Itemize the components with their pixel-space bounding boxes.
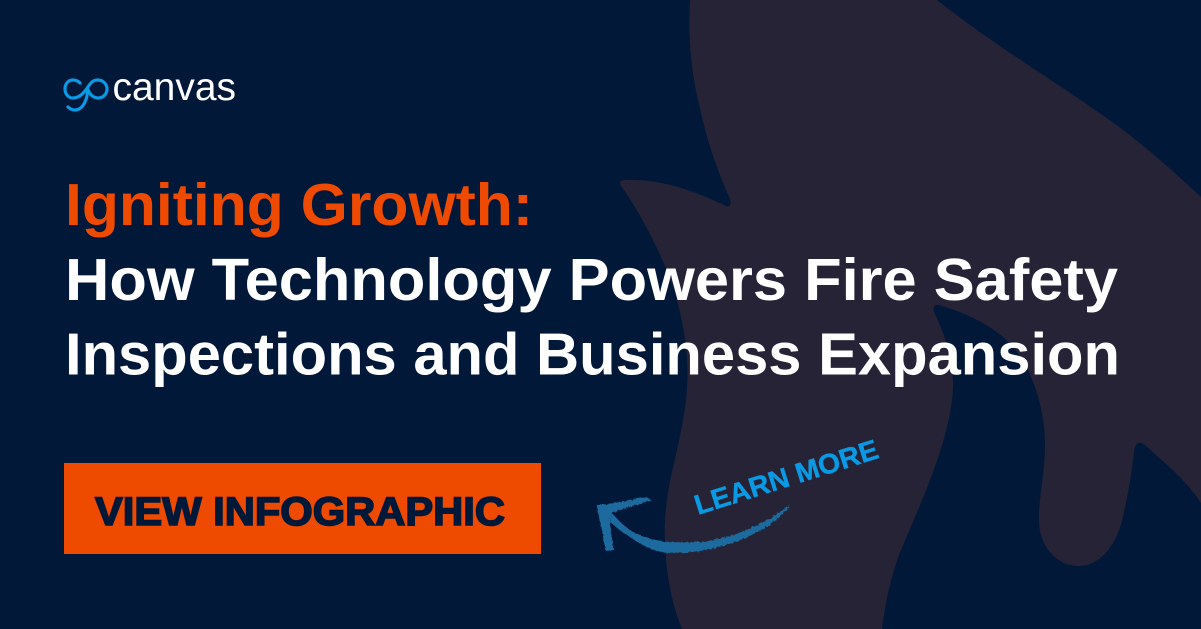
hand-drawn arrow (597, 497, 790, 553)
button background (64, 463, 541, 554)
arrow head (597, 497, 652, 551)
arrow shaft (610, 505, 790, 553)
title line 1: Igniting Growth: (65, 172, 533, 238)
title line 2: How Technology Powers Fire Safety (65, 247, 1118, 313)
title line 3: Inspections and Business Expansion (65, 322, 1120, 388)
flame background shape (620, 0, 1201, 629)
logo: gocanvas (65, 66, 236, 110)
logo wordmark: canvas (112, 66, 236, 109)
learn more label: LEARN MORE (690, 434, 882, 521)
button label: VIEW INFOGRAPHIC (95, 490, 505, 534)
button: view infographic (64, 463, 541, 554)
title (65, 172, 1120, 388)
logo icon: go infinity mark (65, 80, 107, 110)
